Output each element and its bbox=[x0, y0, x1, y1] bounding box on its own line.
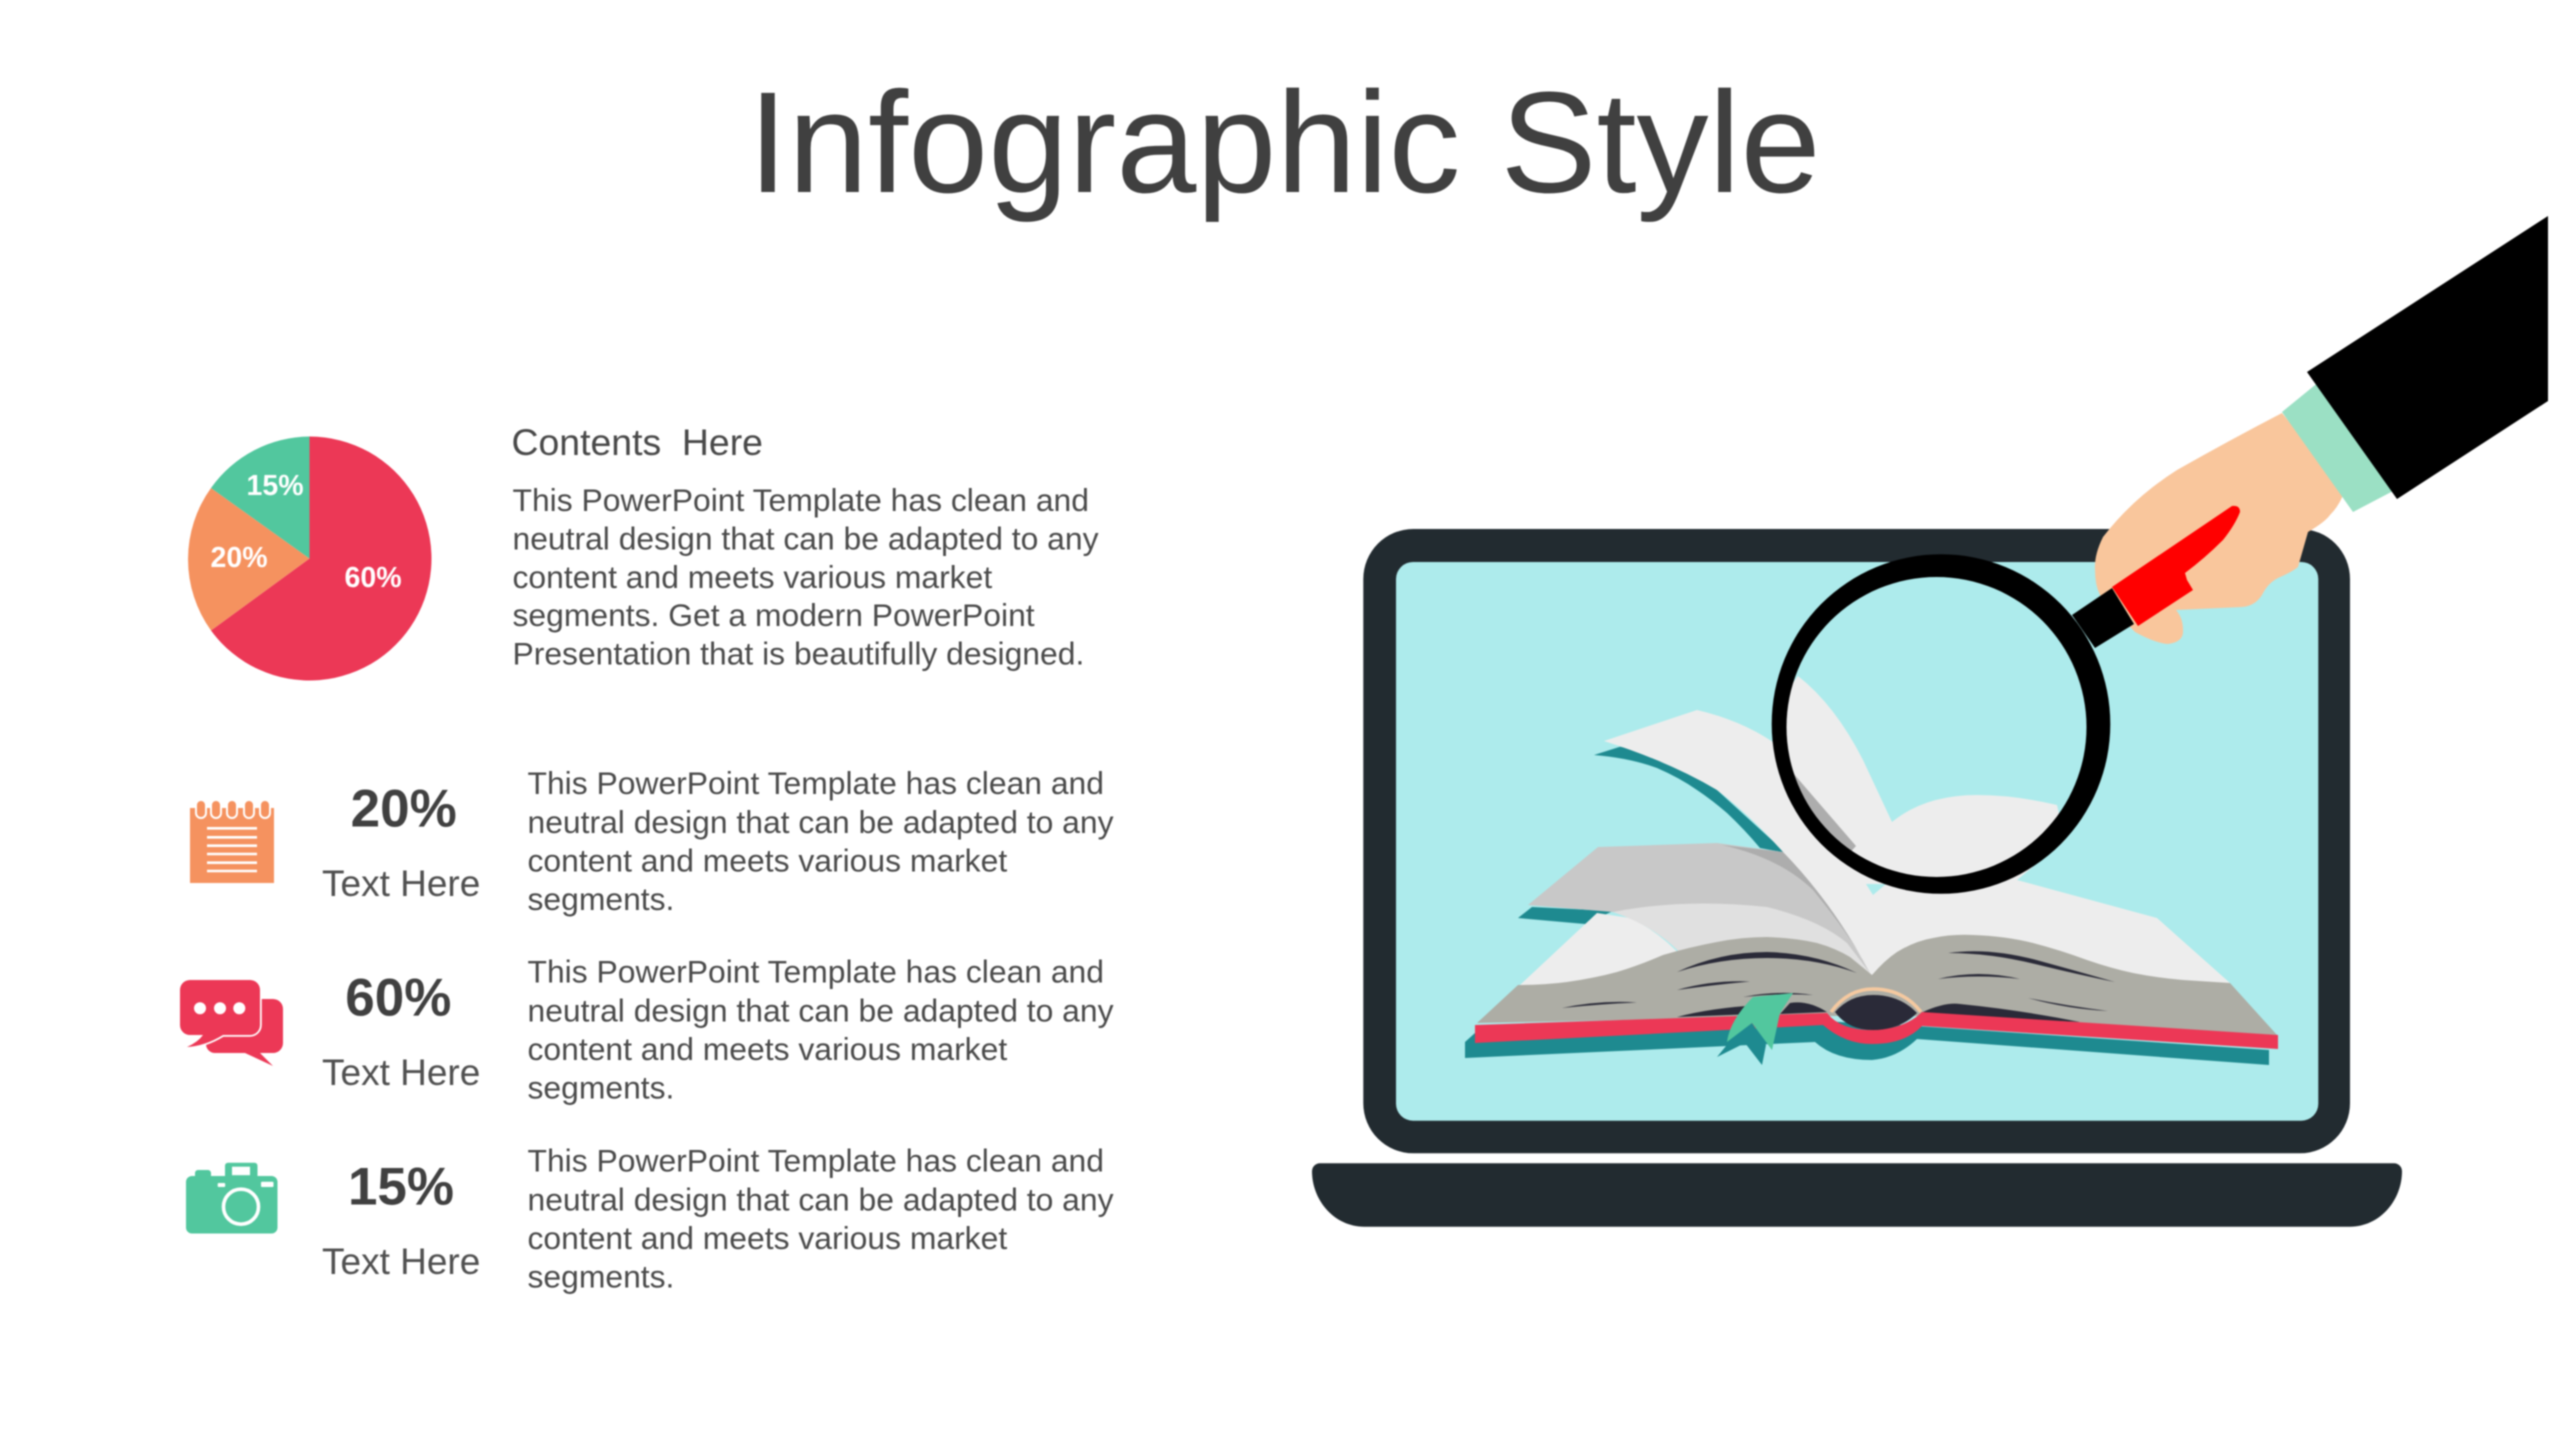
icon: camera bbox=[186, 1163, 278, 1234]
description: content and meets various market bbox=[528, 1220, 1007, 1256]
contents paragraph: neutral design that can be adapted to any bbox=[512, 520, 1099, 556]
spine binding arc bbox=[1831, 989, 1921, 1012]
left page bbox=[1520, 913, 1685, 985]
hand bbox=[2095, 413, 2345, 644]
contents paragraph: Presentation that is beautifully designed. bbox=[512, 636, 1084, 672]
description: neutral design that can be adapted to any bbox=[528, 992, 1114, 1028]
flying page shadow bbox=[1594, 747, 1786, 853]
laptop base bbox=[1312, 1163, 2402, 1227]
bookmark bbox=[1717, 993, 1793, 1065]
laptop lid bbox=[1363, 529, 2350, 1153]
icon: chat bubbles bbox=[180, 980, 283, 1066]
percent 60: 60% bbox=[345, 968, 451, 1028]
back cover bbox=[1465, 1020, 2269, 1065]
description bbox=[528, 765, 1114, 917]
laptop screen bbox=[1396, 562, 2318, 1121]
description: This PowerPoint Template has clean and bbox=[528, 765, 1104, 801]
open book bbox=[1465, 676, 2278, 1065]
description: content and meets various market bbox=[528, 1031, 1007, 1067]
description bbox=[528, 1143, 1114, 1294]
page block bbox=[1477, 935, 2277, 1035]
row: 60% bbox=[180, 954, 1114, 1106]
description: neutral design that can be adapted to any bbox=[528, 1182, 1114, 1218]
icon: notepad bbox=[190, 800, 274, 883]
pie chart bbox=[188, 436, 431, 680]
description: This PowerPoint Template has clean and bbox=[528, 1143, 1104, 1179]
text marks bbox=[1562, 951, 2115, 1022]
row: 15% bbox=[186, 1143, 1114, 1294]
contents paragraph bbox=[512, 482, 1099, 672]
label: Text Here bbox=[322, 863, 480, 904]
cyan notch below lens bbox=[1866, 884, 1886, 895]
description: segments. bbox=[528, 1258, 674, 1294]
contents paragraph: This PowerPoint Template has clean and bbox=[512, 482, 1089, 518]
label: Text Here bbox=[322, 1241, 480, 1282]
percent 20: 20% bbox=[351, 780, 457, 838]
title: Infographic Style bbox=[748, 62, 1821, 223]
raised page fold bbox=[1722, 845, 1867, 967]
crease in lens bbox=[1793, 773, 1856, 858]
pie chart: 60% bbox=[344, 562, 402, 594]
pie chart: 20% bbox=[210, 542, 268, 574]
hand holding magnifier bbox=[1772, 216, 2548, 894]
contents heading: Contents Here bbox=[512, 421, 763, 463]
magnifier handle bbox=[2112, 506, 2240, 626]
percent 15: 15% bbox=[348, 1158, 454, 1216]
description: segments. bbox=[528, 1070, 674, 1106]
sleeve bbox=[2307, 216, 2548, 499]
spine bbox=[1835, 995, 1917, 1030]
laptop bbox=[1312, 529, 2402, 1227]
pie chart: 15% bbox=[246, 470, 304, 502]
row: 20% bbox=[190, 765, 1114, 917]
description: neutral design that can be adapted to any bbox=[528, 804, 1114, 840]
lower shadow page bbox=[1518, 907, 1613, 924]
contents paragraph: content and meets various market bbox=[512, 559, 992, 595]
description bbox=[528, 954, 1114, 1106]
raised grey page bbox=[1528, 843, 1870, 973]
description: This PowerPoint Template has clean and bbox=[528, 954, 1104, 990]
contents paragraph: segments. Get a modern PowerPoint bbox=[512, 597, 1035, 633]
magnifier ring bbox=[1772, 554, 2110, 894]
label: Text Here bbox=[322, 1052, 480, 1093]
flying page and right page bbox=[1604, 676, 2230, 985]
description: segments. bbox=[528, 881, 674, 917]
cuff bbox=[2282, 381, 2395, 512]
red cover edge bbox=[1475, 1012, 2278, 1049]
magnifier neck bbox=[2072, 588, 2134, 648]
description: content and meets various market bbox=[528, 842, 1007, 878]
left page curl bbox=[1613, 903, 1870, 973]
